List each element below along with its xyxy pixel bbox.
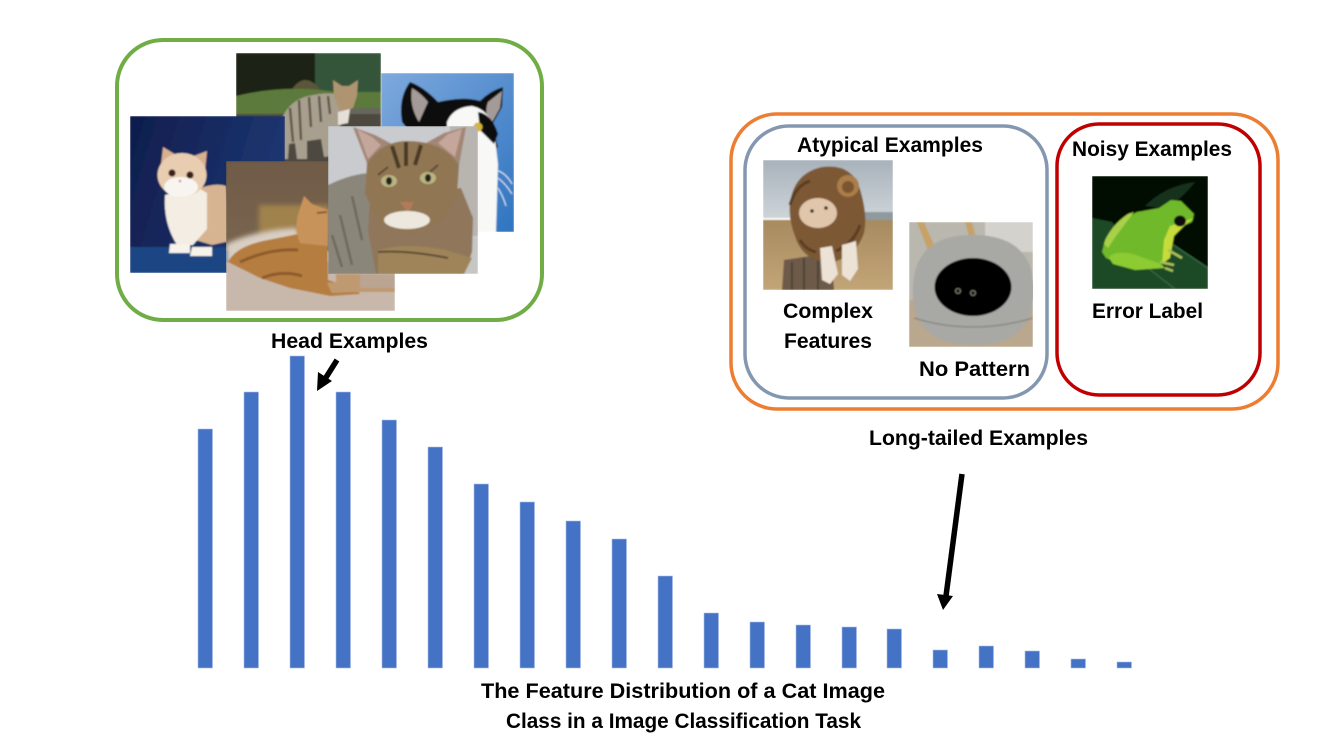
photo: cat in lion mane: [763, 160, 893, 290]
photo: tabby kitten on grass: [236, 53, 381, 164]
panel: atypical examples: [745, 126, 1047, 398]
photo: black and white cat on blue: [381, 73, 514, 232]
label: complex features: Features: [784, 330, 872, 353]
panel: long-tailed examples: [731, 114, 1278, 409]
label: no pattern: No Pattern: [919, 358, 1030, 381]
panel: noisy examples: [1057, 124, 1260, 395]
panel border: blue-grey box: [745, 126, 1047, 398]
photo: cream kitten on navy: [130, 116, 285, 273]
heading: head examples: Head Examples: [271, 330, 428, 353]
chart caption: Class in a Image Classification Task: [506, 710, 861, 733]
arrow: long-tailed examples pointer: [937, 474, 962, 610]
heading: noisy examples: Noisy Examples: [1072, 138, 1232, 161]
heading: atypical examples: Atypical Examples: [797, 134, 983, 157]
bar chart: feature distribution: [198, 356, 1132, 668]
photo: orange cat on a bed: [226, 161, 395, 311]
label: error label: Error Label: [1092, 300, 1203, 323]
label: complex features: Complex: [783, 300, 873, 323]
arrow: head examples pointer: [317, 360, 337, 391]
panel: head examples: [117, 40, 542, 320]
panel border: red box: [1057, 124, 1260, 395]
panel border: green rounded box: [117, 40, 542, 320]
photo: green tree frog on a leaf: [1092, 176, 1208, 289]
label: complex features: [783, 300, 873, 353]
heading: long-tailed examples: Long-tailed Examples: [869, 427, 1088, 450]
photo: large tabby lying down: [328, 126, 478, 274]
chart caption: [481, 680, 885, 733]
chart caption: The Feature Distribution of a Cat Image: [481, 680, 885, 703]
panel border: orange outer box: [731, 114, 1278, 409]
photo: black cat in grey pod: [909, 222, 1034, 347]
